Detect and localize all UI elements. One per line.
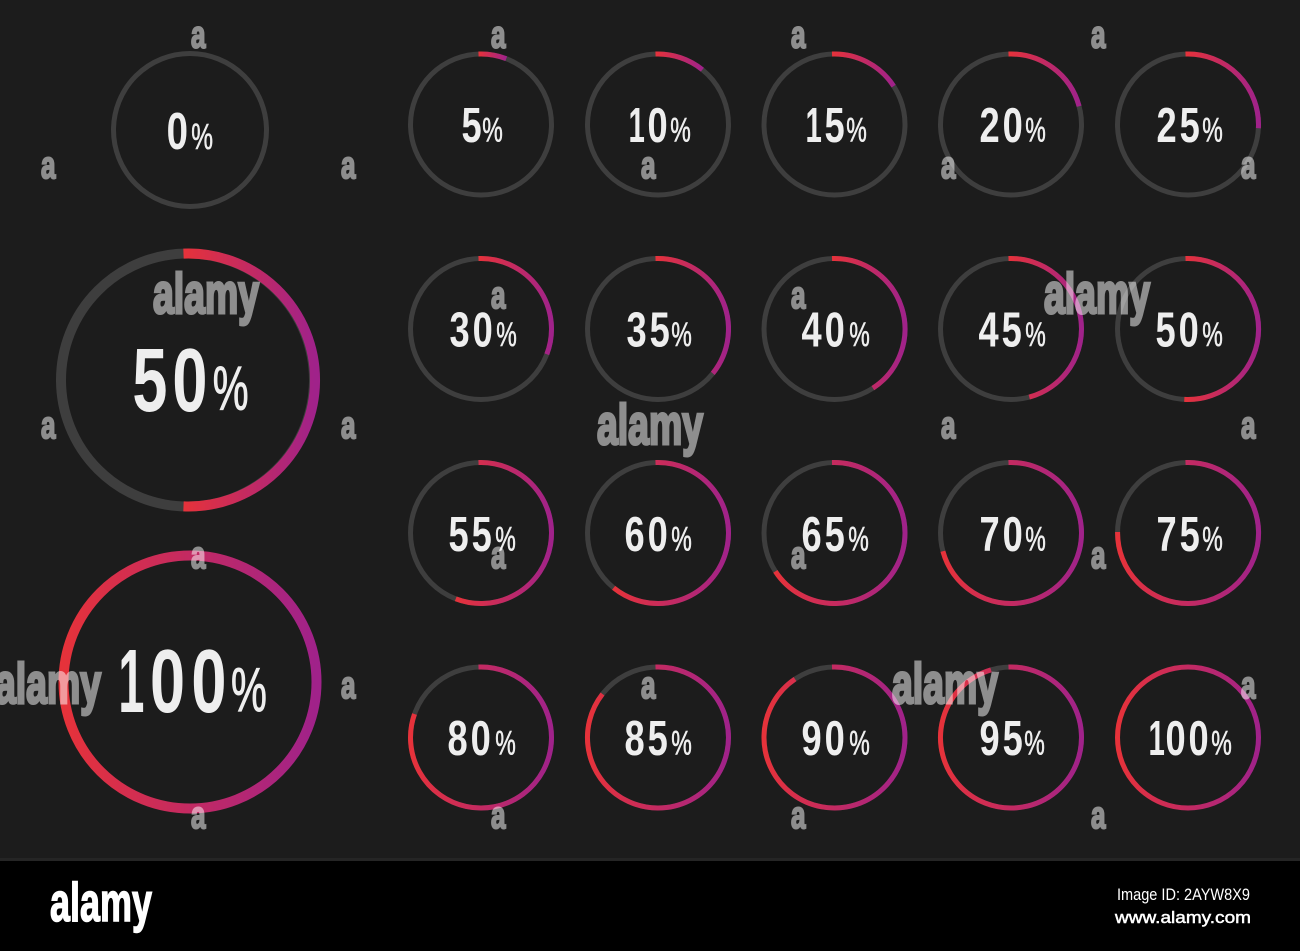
watermark tiles: a <box>191 795 206 837</box>
ring: 15%: 5 <box>824 99 848 153</box>
ring: 45%: 45 <box>978 303 1025 358</box>
watermark tiles: a <box>191 535 206 577</box>
ring: 100%: % <box>1211 725 1232 763</box>
ring: 50% <box>1118 258 1259 400</box>
ring: 30%: 30 <box>450 303 496 358</box>
ring: 30%: % <box>496 317 517 354</box>
watermark tiles: a <box>641 665 656 707</box>
watermark logos <box>0 262 1150 716</box>
ring: 60% <box>588 462 729 604</box>
ring: 80% <box>410 667 552 808</box>
watermark logos: alamy <box>153 262 259 326</box>
ring: large 100% <box>64 556 316 808</box>
ring: 85%: 85 <box>624 712 671 766</box>
ring: 75%: 75 <box>1156 508 1203 562</box>
ring: 20%: 20 <box>980 99 1026 153</box>
ring: 35%: % <box>671 317 692 354</box>
watermark tiles: a <box>341 145 356 187</box>
ring: large 0%: 0 <box>167 102 188 160</box>
watermark tiles: a <box>191 14 206 56</box>
ring: 70% <box>940 462 1082 604</box>
ring: 10%: 1 <box>628 97 647 153</box>
ring: 40%: % <box>849 317 870 354</box>
ring: 40% <box>764 258 905 400</box>
ring: large 0% <box>114 54 266 206</box>
ring: 95%: 95 <box>980 712 1026 766</box>
ring: 20% <box>940 54 1082 195</box>
ring: 35% <box>588 258 728 400</box>
ring: 10%: % <box>670 112 691 150</box>
watermark logos: alamy <box>597 393 703 457</box>
ring: 100%: 0 <box>1166 712 1189 766</box>
ring: 100%: 1 <box>1148 710 1167 766</box>
watermark tiles: a <box>791 795 806 837</box>
watermark tiles: a <box>1241 145 1256 187</box>
ring: large 100%: 0 <box>150 632 185 732</box>
ring: 55% <box>410 462 552 604</box>
ring: large 50%: 5 <box>132 331 167 431</box>
ring: 5%: 5 <box>462 99 485 153</box>
ring: 75% <box>1118 462 1259 604</box>
watermark tiles: a <box>41 145 56 187</box>
ring: 65%: % <box>848 521 869 559</box>
ring: 75%: % <box>1202 521 1223 559</box>
ring: 50%: 50 <box>1156 303 1202 358</box>
ring: 40%: 40 <box>802 303 848 358</box>
ring: 60%: % <box>671 521 692 559</box>
ring: 10%: 0 <box>648 99 671 153</box>
watermark logos: alamy <box>1044 262 1150 326</box>
ring: 45% <box>940 258 1082 400</box>
ring: large 0%: % <box>191 116 213 157</box>
ring: 25%: 25 <box>1156 99 1203 153</box>
ring: 70%: % <box>1025 521 1046 559</box>
watermark tiles: a <box>791 535 806 577</box>
watermark tiles: a <box>41 405 56 447</box>
ring: 85% <box>587 667 728 808</box>
watermark tiles: a <box>491 275 506 317</box>
ring: 50%: % <box>1202 317 1223 354</box>
watermark tiles: a <box>1091 14 1106 56</box>
ring: large 50%: % <box>213 355 249 424</box>
ring: 5% <box>410 54 552 195</box>
ring: 90%: % <box>849 725 870 763</box>
watermark tiles: a <box>491 795 506 837</box>
ring: large 100%: 1 <box>118 632 144 732</box>
ring: 45%: % <box>1025 317 1046 354</box>
ring: 35%: 35 <box>626 303 673 358</box>
ring: 60%: 60 <box>624 508 671 562</box>
footer bar: www.alamy.com <box>1114 908 1251 927</box>
watermark tiles: a <box>491 535 506 577</box>
watermark tiles: a <box>941 145 956 187</box>
ring: large 100%: % <box>231 656 267 725</box>
ring: 95%: % <box>1024 725 1045 763</box>
watermark tiles: a <box>1241 405 1256 447</box>
footer bar: alamy <box>50 871 152 933</box>
ring: 5%: % <box>482 112 503 150</box>
ring: 15%: 1 <box>806 97 824 153</box>
ring: 80%: % <box>495 725 516 763</box>
ring: large 50% <box>61 254 315 506</box>
ring: 25%: % <box>1202 112 1223 150</box>
watermark tiles: a <box>491 14 506 56</box>
ring: 80%: 80 <box>448 712 494 766</box>
watermark tiles: a <box>1091 535 1106 577</box>
ring: 65%: 65 <box>802 508 848 562</box>
watermark tiles: a <box>791 14 806 56</box>
ring: 55%: % <box>495 521 516 559</box>
ring: 100% <box>1118 667 1258 808</box>
ring: 65% <box>764 462 905 604</box>
ring: 25% <box>1118 54 1258 195</box>
ring: 10% <box>588 54 728 195</box>
ring: 30% <box>410 258 552 400</box>
watermark tiles: a <box>341 405 356 447</box>
watermark tiles: a <box>941 405 956 447</box>
watermark tiles: a <box>791 275 806 317</box>
ring: 55%: 55 <box>448 508 495 562</box>
ring: 95% <box>940 667 1082 808</box>
watermark tiles: a <box>641 145 656 187</box>
ring: 100%: 0 <box>1188 712 1212 766</box>
ring: 70%: 70 <box>980 508 1026 562</box>
watermark tiles: a <box>341 665 356 707</box>
ring: 90%: 90 <box>802 712 848 766</box>
ring: 90% <box>764 667 905 808</box>
ring: 15% <box>764 54 905 195</box>
watermark tiles: a <box>1241 665 1256 707</box>
footer bar: Image ID: 2AYW8X9 <box>1117 886 1250 904</box>
ring: large 100%: 0 <box>191 632 226 732</box>
watermark logos: alamy <box>892 652 998 716</box>
ring: large 50%: 0 <box>172 331 207 431</box>
footer bar <box>0 858 1300 951</box>
ring: 20%: % <box>1025 112 1046 150</box>
ring: 15%: % <box>846 112 867 150</box>
watermark tiles: a <box>1091 795 1106 837</box>
ring: 85%: % <box>671 725 692 763</box>
